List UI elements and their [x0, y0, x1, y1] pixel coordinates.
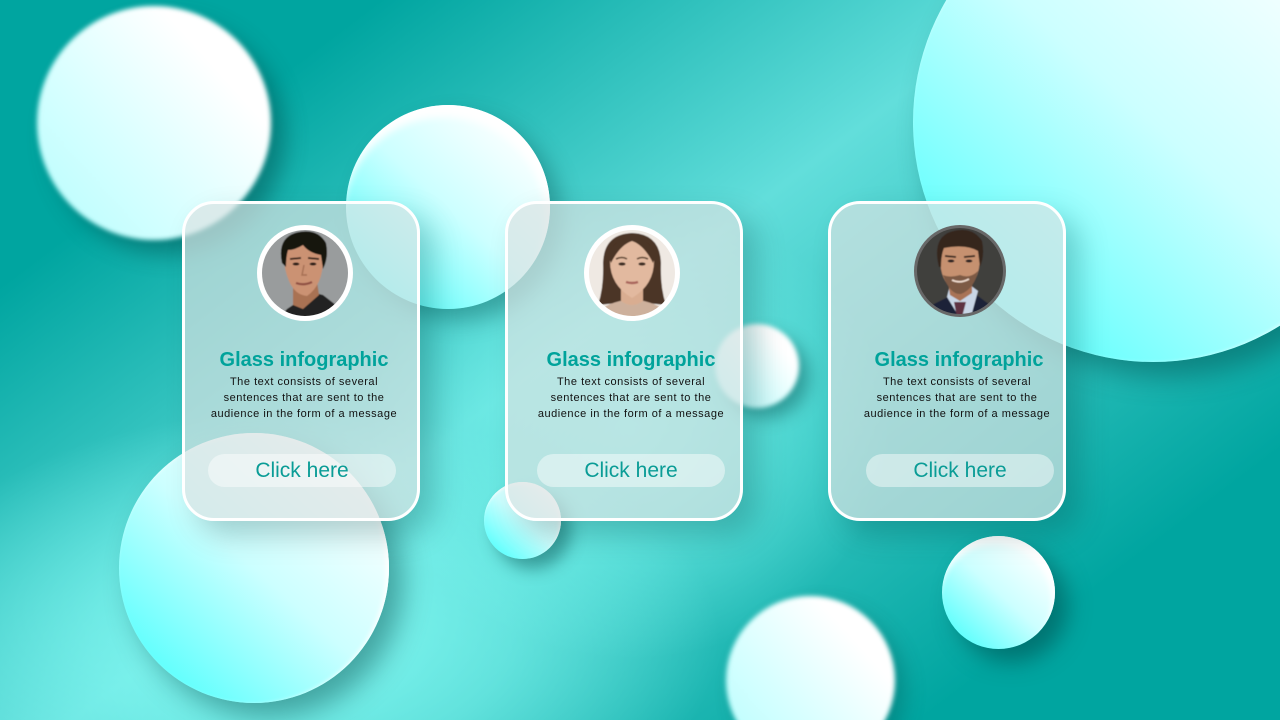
- heading: Glass infographic: [220, 349, 388, 371]
- heading: Glass infographic: [875, 349, 1043, 371]
- body text: sentences that are sent to the: [551, 392, 711, 404]
- button: [866, 454, 1054, 487]
- body text: audience in the form of a message: [864, 408, 1050, 420]
- body text: [211, 376, 397, 420]
- bubble: above first card: [346, 105, 550, 309]
- body text: sentences that are sent to the: [877, 392, 1037, 404]
- portrait: man in suit: [914, 225, 1006, 317]
- bubble: blurred middle: [715, 324, 799, 408]
- body text: The text consists of several: [557, 376, 705, 388]
- portrait: man in black shirt: [257, 225, 353, 321]
- button: Click here: [913, 459, 1007, 482]
- bubble: blurred bottom: [726, 596, 895, 720]
- panel: card 2: [505, 201, 743, 521]
- bubble: large bottom left: [119, 433, 389, 703]
- body text: [538, 376, 724, 420]
- panel: card 1: [182, 201, 420, 521]
- bubble: blurred top left: [37, 6, 271, 240]
- heading: Glass infographic: [547, 349, 715, 371]
- body text: The text consists of several: [883, 376, 1031, 388]
- button: [537, 454, 725, 487]
- button: Click here: [584, 459, 678, 482]
- bubble: large top right: [913, 0, 1280, 362]
- portrait: woman with long hair: [584, 225, 680, 321]
- body text: audience in the form of a message: [538, 408, 724, 420]
- body text: sentences that are sent to the: [224, 392, 384, 404]
- body text: [864, 376, 1050, 420]
- bubble: small bottom right: [942, 536, 1055, 649]
- body text: audience in the form of a message: [211, 408, 397, 420]
- button: Click here: [255, 459, 349, 482]
- button: [208, 454, 396, 487]
- bubble: small between cards: [484, 482, 561, 559]
- panel: card 3: [828, 201, 1066, 521]
- body text: The text consists of several: [230, 376, 378, 388]
